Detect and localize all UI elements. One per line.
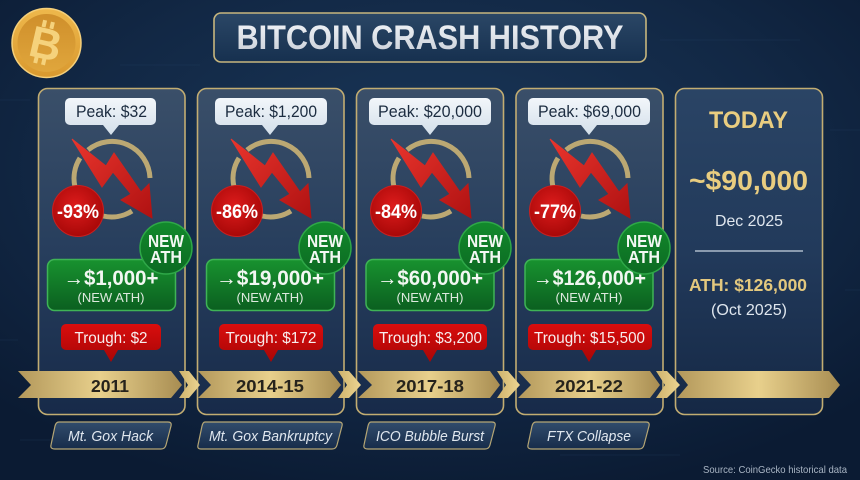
timeline ribbon: 2011	[18, 371, 200, 398]
new ATH badge: ATH	[150, 247, 182, 267]
timeline ribbon: 2014-15	[198, 371, 361, 398]
drop percentage	[212, 186, 262, 236]
timeline ribbon: 2014-15: 2014-15	[236, 376, 304, 396]
new ATH badge	[459, 222, 511, 274]
icon: bitcoin coin	[12, 8, 81, 78]
all-time high date: (Oct 2025)	[711, 302, 787, 319]
trough label: Trough: $172	[226, 330, 316, 347]
drop percentage	[370, 186, 422, 236]
peak label: Peak: $1,200	[225, 103, 317, 121]
peak label: Peak: $69,000	[538, 103, 641, 121]
peak label	[369, 98, 491, 135]
new ATH badge: NEW	[307, 231, 343, 251]
cause label: FTX Collapse: FTX Collapse	[547, 429, 631, 445]
timeline ribbon: 2017-18	[358, 371, 520, 398]
new ATH badge: NEW	[467, 231, 503, 251]
timeline ribbon: 2021-22	[518, 371, 680, 398]
peak label	[528, 98, 650, 135]
peak label	[65, 98, 156, 135]
peak label	[215, 98, 327, 135]
new ATH badge: ATH	[309, 247, 341, 267]
new ATH badge	[140, 222, 192, 274]
recovery box: →$19,000+	[216, 267, 324, 290]
cause label: Mt. Gox Bankruptcy	[198, 422, 342, 449]
current date: Dec 2025	[715, 213, 783, 230]
recovery box: →$60,000+	[377, 267, 483, 290]
new ATH badge	[299, 222, 351, 274]
trough label: Trough: $2	[74, 330, 148, 347]
cause label: FTX Collapse	[528, 422, 649, 449]
new ATH badge	[618, 222, 670, 274]
recovery box: (NEW ATH)	[397, 290, 463, 305]
icon: bitcoin coin: B	[25, 17, 67, 72]
cause label: Mt. Gox Hack	[51, 422, 171, 449]
drop percentage	[530, 186, 580, 236]
recovery box: (NEW ATH)	[556, 290, 622, 305]
recovery box	[206, 260, 334, 310]
trough label	[528, 324, 652, 362]
new ATH badge: ATH	[628, 247, 660, 267]
recovery box: →$1,000+	[64, 267, 158, 290]
timeline ribbon: 2021-22: 2021-22	[555, 376, 623, 396]
icon: crash arrow with ring	[550, 139, 630, 218]
drop percentage: -93%	[57, 202, 99, 223]
recovery box: (NEW ATH)	[78, 290, 144, 305]
drop percentage: -77%	[534, 202, 576, 223]
peak label: Peak: $20,000	[378, 103, 482, 121]
drop percentage	[52, 186, 104, 236]
current price: ~$90,000	[689, 165, 808, 196]
today heading: TODAY	[709, 107, 788, 134]
panel: 2017-18	[356, 88, 511, 414]
trough label	[219, 324, 323, 362]
drop percentage: -84%	[375, 202, 417, 223]
panel: 2011	[38, 88, 192, 414]
trough label: Trough: $15,500	[534, 330, 645, 347]
cause label: ICO Bubble Burst	[364, 422, 495, 449]
timeline ribbon: 2011: 2011	[91, 376, 129, 396]
title: BITCOIN CRASH HISTORY	[236, 19, 624, 57]
recovery box	[366, 260, 494, 310]
trough label: Trough: $3,200	[379, 330, 482, 347]
peak label: Peak: $32	[76, 103, 147, 121]
cause label: Mt. Gox Hack: Mt. Gox Hack	[68, 429, 154, 445]
timeline ribbon: 2017-18: 2017-18	[396, 376, 464, 396]
cause label: Mt. Gox Bankruptcy: Mt. Gox Bankruptcy	[209, 429, 333, 445]
drop percentage: -86%	[216, 202, 258, 223]
recovery box	[525, 260, 653, 310]
new ATH badge: NEW	[148, 231, 184, 251]
panel: 2021-22	[516, 88, 670, 414]
trough label	[61, 324, 161, 362]
cause label: ICO Bubble Burst: ICO Bubble Burst	[376, 429, 485, 445]
source note: Source: CoinGecko historical data	[703, 464, 847, 476]
icon: crash arrow with ring	[231, 139, 311, 218]
new ATH badge: ATH	[469, 247, 501, 267]
panel: 2014-15	[198, 88, 351, 414]
new ATH badge: NEW	[626, 231, 662, 251]
icon: crash arrow with ring	[72, 139, 152, 218]
recovery box	[48, 260, 176, 310]
timeline ribbon: today	[677, 371, 840, 398]
panel: today	[676, 88, 822, 414]
icon: crash arrow with ring	[391, 139, 471, 218]
recovery box: (NEW ATH)	[237, 290, 303, 305]
all-time high: ATH: $126,000	[689, 275, 807, 295]
recovery box: →$126,000+	[533, 267, 646, 290]
trough label	[373, 324, 487, 362]
